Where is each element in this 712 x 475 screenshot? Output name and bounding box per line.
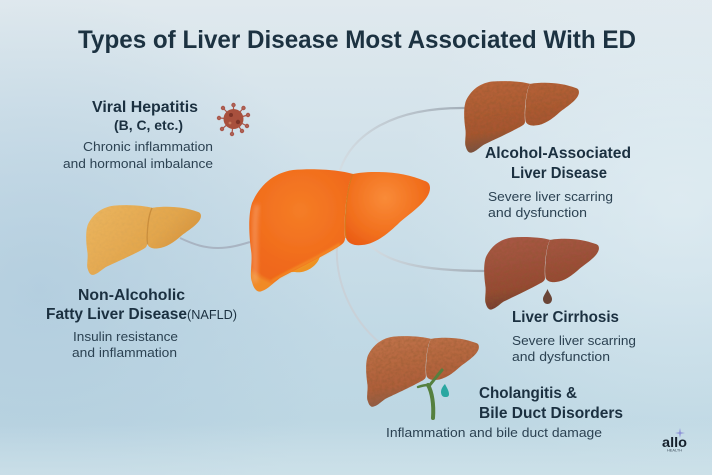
text block: cholangitis and bile duct disorders: Inflammation and bile duct damage bbox=[386, 425, 602, 440]
icon: bile duct bbox=[418, 370, 442, 418]
text block: viral hepatitis: and hormonal imbalance bbox=[63, 156, 213, 171]
logo: allo health: HEALTH bbox=[667, 448, 683, 452]
icon: teal drop bbox=[441, 384, 449, 397]
text block: viral hepatitis bbox=[63, 99, 213, 171]
connector: fatty liver to main liver bbox=[180, 238, 250, 248]
icon: alcohol-associated liver bbox=[464, 81, 579, 153]
icon: fatty liver bbox=[86, 205, 201, 275]
text block: viral hepatitis: (B, C, etc.) bbox=[114, 118, 183, 133]
text block: liver cirrhosis: Liver Cirrhosis bbox=[512, 309, 619, 326]
text block: liver cirrhosis: Severe liver scarring bbox=[512, 333, 636, 348]
text block: alcohol-associated liver disease: Liver Disease bbox=[511, 165, 607, 182]
icon: cirrhosis liver bbox=[484, 237, 599, 310]
text block: NAFLD: and inflammation bbox=[72, 345, 177, 360]
text block: liver cirrhosis bbox=[512, 309, 636, 364]
text block: NAFLD: Insulin resistance bbox=[73, 329, 178, 344]
text block: viral hepatitis: Chronic inflammation bbox=[83, 139, 213, 154]
text block: cholangitis and bile duct disorders: Bile Duct Disorders bbox=[479, 405, 623, 422]
text block: NAFLD bbox=[46, 287, 237, 360]
icon: main orange liver bbox=[249, 169, 430, 292]
text block: cholangitis and bile duct disorders: Cholangitis & bbox=[479, 385, 577, 402]
text block: NAFLD: Fatty Liver Disease bbox=[46, 306, 187, 323]
text block: cholangitis and bile duct disorders bbox=[386, 385, 623, 440]
logo: allo health: allo bbox=[662, 434, 687, 450]
icon: dark drop bbox=[543, 289, 552, 304]
text block: viral hepatitis: Viral Hepatitis bbox=[92, 99, 198, 116]
text block: alcohol-associated liver disease: Severe liver scarring bbox=[488, 189, 613, 204]
text block: alcohol-associated liver disease: Alcohol-Associated bbox=[485, 145, 631, 162]
text block: alcohol-associated liver disease bbox=[485, 145, 631, 220]
text block: alcohol-associated liver disease: and dysfunction bbox=[488, 205, 587, 220]
text block: NAFLD: (NAFLD) bbox=[187, 307, 237, 322]
text block: NAFLD: Non-Alcoholic bbox=[78, 287, 185, 304]
icon: virus bbox=[217, 103, 250, 136]
connector: main liver to alcohol-associated liver bbox=[340, 108, 466, 170]
title: Types of Liver Disease Most Associated With ED bbox=[78, 26, 636, 54]
logo: allo health bbox=[662, 428, 687, 452]
connector: main liver to cirrhosis liver bbox=[368, 243, 486, 271]
connector: main liver to bile duct liver bbox=[337, 245, 380, 343]
icon: bile duct liver bbox=[366, 336, 479, 407]
text block: liver cirrhosis: and dysfunction bbox=[512, 349, 610, 364]
